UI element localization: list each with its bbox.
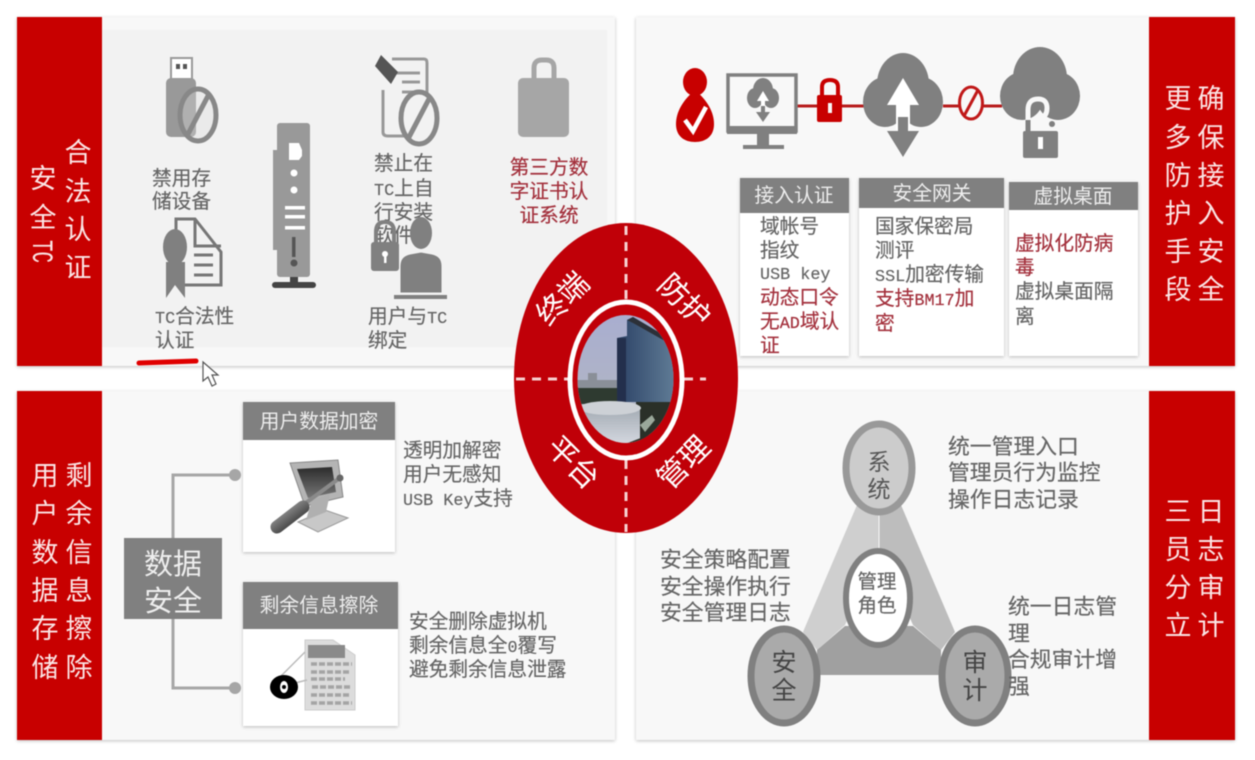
node: 管理角色: 角色 <box>857 595 897 618</box>
icon: no software install <box>375 55 437 144</box>
table: 接入认证: 证 <box>760 335 780 358</box>
card: 剩余信息擦除 <box>243 582 398 726</box>
red side bar: 确保接入安全 <box>1149 17 1235 366</box>
text: erase features: 剩余信息全0覆写 <box>409 635 557 658</box>
label: 禁用存储设备: 储设备 <box>152 191 211 214</box>
text: security role: 安全管理日志 <box>660 601 791 627</box>
panel: ensure secure access <box>636 17 1235 366</box>
label: TC合法性认证: TC合法性 <box>155 307 234 329</box>
red side bar: 日志审计: 日志审计 <box>1198 499 1224 644</box>
table: 接入认证: 动态口令 <box>760 287 839 310</box>
icon: server <box>272 123 316 288</box>
text: encryption features: 用户无感知 <box>403 464 501 487</box>
red side bar: 日志审计 <box>1149 391 1235 740</box>
label: 第三方数字证书认证系统: 证系统 <box>519 205 579 228</box>
icon: prohibited sign <box>960 87 982 119</box>
label: 用户与TC绑定: 绑定 <box>368 330 407 353</box>
text: audit role: 强 <box>1008 676 1030 701</box>
node: 系统 <box>846 424 912 512</box>
table: 接入认证: USB key <box>760 266 830 285</box>
red side bar: 确保接入安全: 确保接入安全 <box>1198 84 1224 308</box>
table: 接入认证: 域帐号 <box>760 216 819 239</box>
red side bar: 日志审计: 三员分立 <box>1164 500 1192 644</box>
table: 接入认证: 接入认证 <box>754 185 834 208</box>
icon: cloud up and down arrows <box>863 53 943 157</box>
text: audit role: 理 <box>1008 623 1030 648</box>
box: 数据安全 <box>124 538 222 620</box>
icon: verified user <box>676 68 714 142</box>
red side bar: 合法认证 <box>17 17 102 366</box>
red side bar: 剩余信息擦除: 用户数据存储 <box>32 464 58 686</box>
icon: padlock grey <box>518 60 569 137</box>
tree connectors <box>173 469 241 694</box>
label: 第三方数字证书认证系统 <box>510 157 589 228</box>
red side bar: 合法认证: TC <box>23 240 57 263</box>
node: 系统: 统 <box>868 477 890 504</box>
icon: mouse cursor <box>203 362 218 386</box>
red side bar: 剩余信息擦除: 剩余信息擦除 <box>66 461 92 686</box>
icon: user bound to TC <box>371 217 447 299</box>
label: 第三方数字证书认证系统: 第三方数 <box>510 157 589 180</box>
table: 安全网关: 国家保密局 <box>875 216 973 239</box>
table: 安全网关: 密 <box>875 313 895 336</box>
white ring <box>570 302 682 458</box>
table: 虚拟桌面 <box>1009 182 1138 356</box>
icon: eye and data document <box>270 640 355 710</box>
box: 数据安全: 安全 <box>144 585 202 620</box>
table: 安全网关: SSL加密传输 <box>875 264 984 287</box>
table: 虚拟桌面: 虚拟化防病 <box>1015 233 1113 256</box>
icon: monitor and screwdriver <box>277 460 348 532</box>
icon: TC certificate <box>163 219 221 298</box>
box: 数据安全: 数据 <box>144 548 202 583</box>
text: security role <box>660 548 791 627</box>
text: security role: 安全操作执行 <box>660 575 791 601</box>
text: system role: 操作日志记录 <box>948 488 1079 514</box>
table: 虚拟桌面: 虚拟桌面隔 <box>1015 281 1113 304</box>
node: 审计 <box>942 629 1008 723</box>
text: system role: 统一管理入口 <box>948 435 1079 461</box>
panel: TC security legal authentication <box>17 17 615 386</box>
center emblem <box>514 223 738 533</box>
text: system role <box>948 435 1101 514</box>
red side bar: 合法认证: 安全 <box>30 164 56 236</box>
text: erase features: 避免剩余信息泄露 <box>409 659 567 682</box>
text: encryption features: USB Key支持 <box>403 488 513 511</box>
label: 禁止在TC上自行安装软件: 行安装 <box>374 202 433 225</box>
label: 平台: 平台 <box>538 430 606 498</box>
label: 终端: 终端 <box>530 266 598 334</box>
red pen annotation <box>139 361 196 363</box>
node: 安全: 全 <box>771 677 797 707</box>
label: 管理: 管理 <box>651 430 719 498</box>
label: 禁止在TC上自行安装软件: 软件 <box>374 225 413 248</box>
icon: red padlock <box>817 80 842 122</box>
text: encryption features: 透明加解密 <box>403 440 501 463</box>
icon: cloud with open lock <box>1000 47 1080 158</box>
table: 虚拟桌面: 离 <box>1015 306 1035 329</box>
node: 审计: 审 <box>962 649 988 679</box>
text: audit role: 合规审计增 <box>1008 648 1117 674</box>
table: 安全网关: 支持BM17加 <box>875 288 974 311</box>
table: 接入认证 <box>740 178 849 358</box>
node: 安全: 安 <box>771 649 797 679</box>
node: 审计: 计 <box>962 677 988 707</box>
table: 接入认证: 指纹 <box>760 240 800 263</box>
card: 用户数据加密 <box>243 402 395 552</box>
text: audit role: 统一日志管 <box>1008 595 1117 621</box>
card: 剩余信息擦除: 剩余信息擦除 <box>260 595 379 618</box>
label: 防护: 防护 <box>649 268 717 336</box>
table: 安全网关: 安全网关 <box>892 183 972 206</box>
icon: monitor with cloud <box>727 75 797 149</box>
text: erase features <box>409 611 567 682</box>
red side bar: 剩余信息擦除 <box>17 391 102 740</box>
label: 禁止在TC上自行安装软件: 禁止在 <box>374 154 433 176</box>
node: 管理角色: 管理 <box>857 571 897 594</box>
photo: office building <box>577 314 676 446</box>
text: audit role <box>1008 595 1117 701</box>
table: 虚拟桌面: 毒 <box>1015 257 1035 280</box>
diagram: management role triangle <box>751 424 1008 723</box>
red side bar: 合法认证: 合法认证 <box>64 138 92 286</box>
table: 虚拟桌面: 虚拟桌面 <box>1033 186 1113 209</box>
node: 安全 <box>751 629 817 723</box>
node: 管理角色 <box>846 551 910 645</box>
table: 安全网关 <box>859 178 1004 356</box>
card: 用户数据加密: 用户数据加密 <box>260 411 378 434</box>
text: security role: 安全策略配置 <box>660 548 791 574</box>
connector lines <box>795 104 1002 108</box>
icon: USB disabled <box>166 58 216 141</box>
label: 用户与TC绑定: 用户与TC <box>368 307 447 329</box>
text: encryption features <box>403 440 513 511</box>
panel: log audit, separation of three roles <box>636 391 1235 740</box>
label: 禁止在TC上自行安装软件: TC上自 <box>374 179 434 201</box>
label: 禁用存储设备: 禁用存 <box>152 169 211 191</box>
text: system role: 管理员行为监控 <box>948 461 1101 487</box>
label: 第三方数字证书认证系统: 字证书认 <box>510 181 589 204</box>
node: 系统: 系 <box>868 450 890 477</box>
label: TC合法性认证: 认证 <box>155 330 194 353</box>
text: erase features: 安全删除虚拟机 <box>409 611 547 634</box>
table: 接入认证: 无AD域认 <box>760 311 840 334</box>
table: 安全网关: 测评 <box>875 240 914 263</box>
red side bar: 确保接入安全: 更多防护手段 <box>1164 86 1192 308</box>
panel: residual information erase <box>17 391 615 740</box>
